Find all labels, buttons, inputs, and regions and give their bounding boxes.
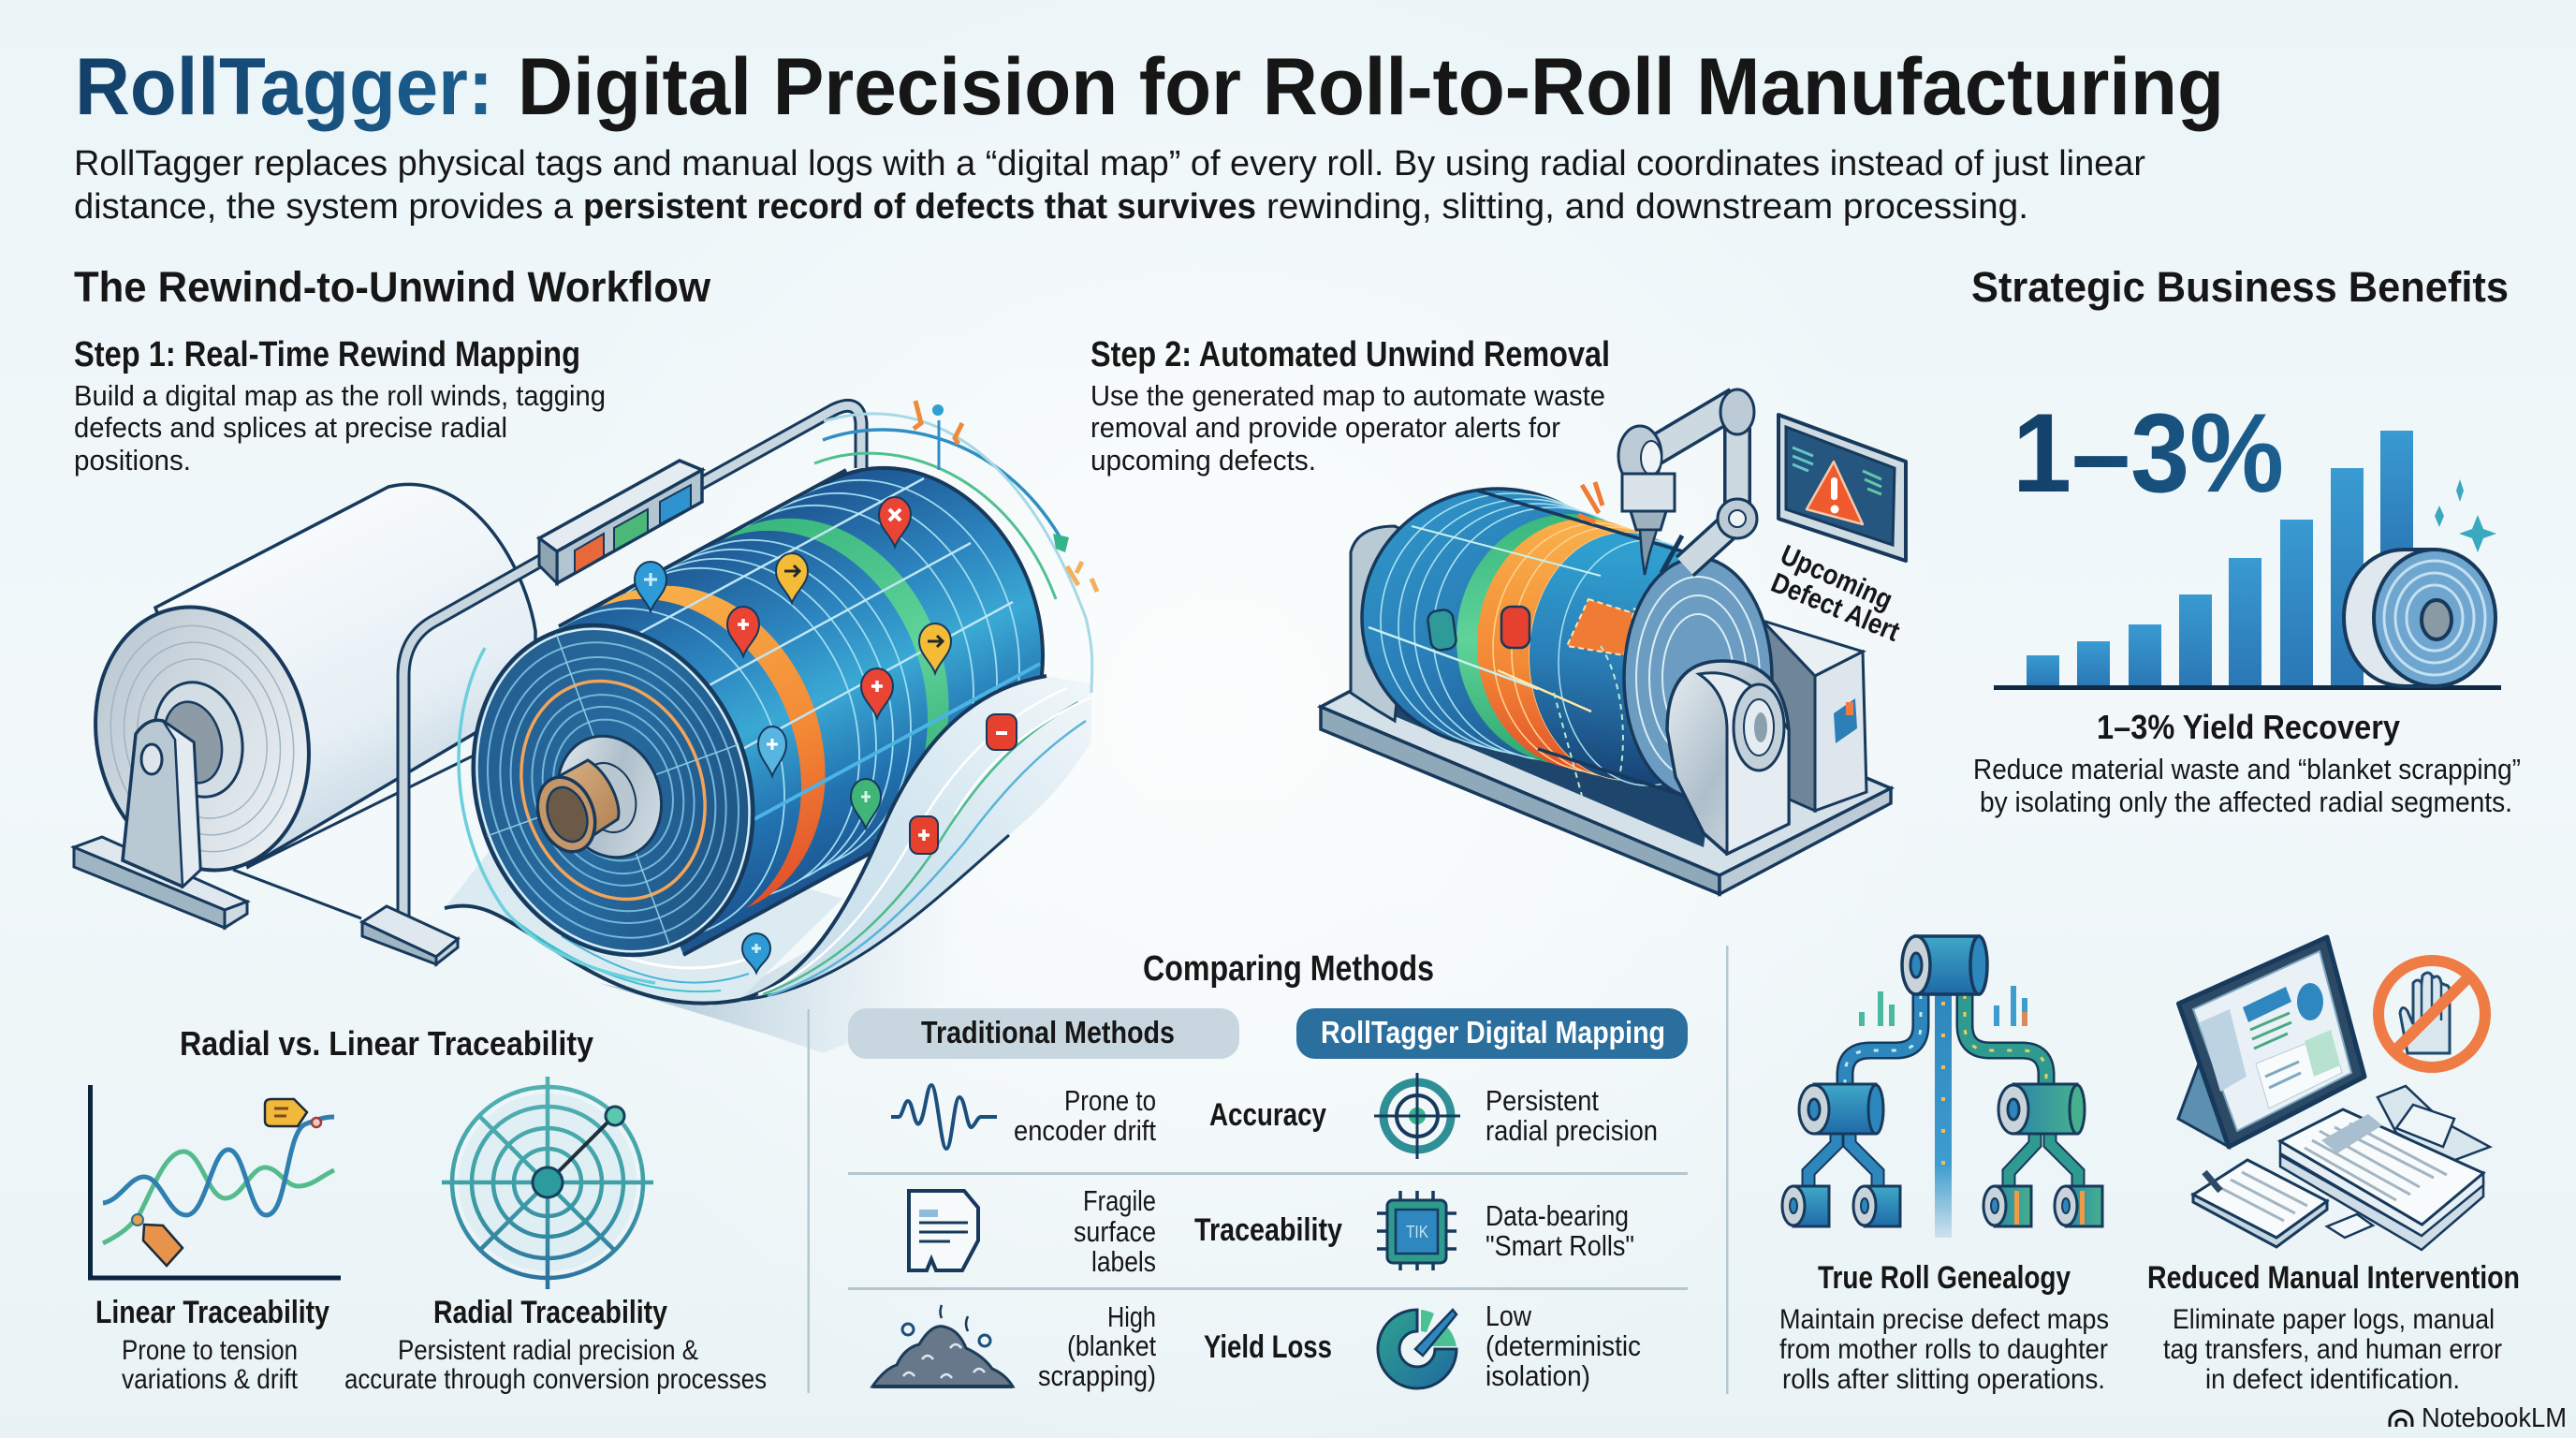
title: Digital Precision for Roll-to-Roll Manufacturing: [518, 42, 2224, 132]
mother roll: [1902, 936, 1987, 994]
icon: front bearing: [1667, 661, 1789, 854]
row: yield loss: High: [1107, 1300, 1156, 1333]
pill: rolltagger digital mapping: [1296, 1008, 1688, 1059]
row: yield loss: (blanket: [1067, 1329, 1156, 1362]
row: traceability: surface: [1074, 1215, 1156, 1248]
linear traceability text: Prone to tension: [122, 1335, 298, 1366]
icon: scrap pile: [872, 1305, 1013, 1388]
linear traceability text: [95, 1295, 329, 1395]
row: traceability: Data-bearing: [1486, 1199, 1629, 1232]
step 2 text: removal and provide operator alerts for: [1090, 411, 1560, 444]
row: yield loss: [872, 1299, 1641, 1392]
icon: tablet with paper logs: [2178, 937, 2490, 1250]
intro text block: RollTagger replaces physical tags and manual logs with a “digital map” of every roll. By using radial coordinates instead of just linear: [74, 144, 2145, 183]
heading: comparing methods: Comparing Methods: [1143, 949, 1434, 989]
icon: reduced pie: [1378, 1310, 1456, 1388]
benefit: reduced manual intervention text: [2147, 1260, 2520, 1395]
row: accuracy: Prone to: [1064, 1084, 1156, 1117]
benefit: yield recovery text: [1973, 708, 2521, 818]
intro text block: persistent record of defects that survives: [583, 187, 1256, 227]
icon: white source roll: [68, 484, 599, 936]
slit rolls: [1782, 1186, 2102, 1226]
icon: roll genealogy tree: [1782, 936, 2102, 1238]
icon: sensing arcs: [459, 401, 1097, 983]
benefit: yield recovery text: 1–3% Yield Recovery: [2097, 708, 2400, 746]
icon: core hub: [528, 722, 678, 872]
defect pins: [635, 497, 1017, 973]
icon: torn label: [909, 1191, 978, 1270]
icon: mapped roll: [1362, 489, 1772, 805]
step 1 text: [74, 335, 606, 477]
illustration: unwind removal machine: [1321, 389, 1906, 894]
benefit: yield recovery text: by isolating only the affected radial segments.: [1980, 785, 2512, 818]
logo: NotebookLM: NotebookLM: [2422, 1403, 2567, 1433]
mini bars: [1859, 986, 2027, 1026]
icon: mapped roll: [428, 468, 1043, 995]
illustration: rewind mapping rolls: [68, 401, 1097, 1053]
step 1 text: defects and splices at precise radial: [74, 411, 507, 444]
row: accuracy: Accuracy: [1209, 1097, 1326, 1133]
row: traceability: "Smart Rolls": [1486, 1229, 1634, 1262]
heading: workflow: The Rewind-to-Unwind Workflow: [74, 263, 711, 311]
radial traceability text: Radial Traceability: [433, 1295, 667, 1330]
row: traceability: Traceability: [1194, 1212, 1342, 1248]
stat: 1–3%: 1–3%: [2012, 390, 2284, 516]
pill: traditional methods: Traditional Methods: [921, 1015, 1175, 1049]
icon: machine base: [1321, 526, 1891, 894]
row: accuracy: radial precision: [1486, 1114, 1658, 1147]
title: RollTagger:: [75, 42, 493, 132]
callout: upcoming defect alert: Upcoming: [1776, 539, 1897, 616]
intro text block: rewinding, slitting, and downstream processing.: [1266, 187, 2028, 227]
benefit: reduced manual intervention text: Eliminate paper logs, manual: [2173, 1304, 2495, 1335]
step 2 text: Use the generated map to automate waste: [1090, 379, 1605, 412]
icon: film web sheet: [739, 676, 1091, 1000]
benefit: true roll genealogy text: rolls after slitting operations.: [1782, 1364, 2105, 1395]
row: yield loss: Low: [1486, 1299, 1532, 1332]
icon: yellow tag: [265, 1099, 321, 1127]
intro text block: [74, 144, 2145, 227]
icon: sensor pipe and bar: [362, 405, 861, 964]
row: yield loss: isolation): [1486, 1359, 1590, 1392]
pill: rolltagger digital mapping: RollTagger Digital Mapping: [1321, 1015, 1665, 1049]
benefit: reduced manual intervention text: tag transfers, and human error: [2163, 1334, 2502, 1365]
pill: traditional methods: [848, 1008, 1239, 1059]
row: traceability: labels: [1091, 1245, 1156, 1278]
callout: upcoming defect alert: [1766, 539, 1904, 648]
radial traceability text: accurate through conversion processes: [344, 1364, 767, 1395]
chart: linear traceability: [90, 1085, 341, 1278]
icon: orange tag: [132, 1214, 183, 1266]
icon: roll end face: [428, 585, 798, 995]
icon: small roll: [2344, 550, 2496, 686]
step 1 text: positions.: [74, 444, 191, 477]
row: accuracy: [891, 1073, 1658, 1159]
bar chart: yield recovery: [1994, 431, 2501, 690]
step 2 text: [1090, 335, 1610, 477]
panel: comparing methods: [848, 949, 1688, 1392]
row: accuracy: Persistent: [1486, 1084, 1599, 1117]
step 2 text: Step 2: Automated Unwind Removal: [1090, 335, 1610, 374]
icon: source roll bracket: [74, 720, 247, 928]
icon: target: [1374, 1073, 1460, 1159]
radial traceability text: Persistent radial precision &: [398, 1335, 698, 1366]
row: yield loss: (deterministic: [1486, 1329, 1641, 1362]
daughter rolls: [1799, 1084, 2085, 1134]
benefit: yield recovery text: Reduce material waste and “blanket scrapping”: [1973, 753, 2521, 785]
row: yield loss: scrapping): [1038, 1359, 1156, 1392]
row: accuracy: encoder drift: [1014, 1114, 1156, 1147]
row: traceability: [909, 1184, 1634, 1278]
callout: upcoming defect alert: Defect Alert: [1766, 567, 1904, 648]
intro text block: distance, the system provides a: [74, 187, 574, 227]
step 1 text: Step 1: Real-Time Rewind Mapping: [74, 335, 580, 374]
linear traceability text: Linear Traceability: [95, 1295, 329, 1330]
icon: film web under roll: [445, 843, 842, 1004]
chart: radial traceability: [442, 1077, 653, 1289]
icon: alert monitor: [1778, 415, 1906, 561]
icon: smart chip: TIK: [1406, 1223, 1428, 1241]
icon: robot arm: [1578, 389, 1757, 575]
row: yield loss: Yield Loss: [1204, 1329, 1332, 1365]
icon: housing cabinet: [1760, 621, 1866, 811]
benefit: true roll genealogy text: Maintain precise defect maps: [1779, 1304, 2109, 1335]
icon: sparkles: [2435, 479, 2496, 552]
row: traceability: Fragile: [1083, 1184, 1156, 1217]
icon: smart chip: [1377, 1191, 1456, 1270]
icon: prohibited hand: [2378, 961, 2485, 1067]
heading: benefits: Strategic Business Benefits: [1971, 263, 2509, 311]
benefit: true roll genealogy text: True Roll Genealogy: [1818, 1260, 2071, 1296]
benefit: true roll genealogy text: from mother rolls to daughter: [1779, 1334, 2108, 1365]
radial traceability text: [344, 1295, 767, 1395]
icon: noisy wave: [891, 1085, 997, 1149]
heading: radial vs linear: Radial vs. Linear Traceability: [180, 1024, 593, 1063]
icon: paper stack: [2280, 1086, 2490, 1250]
icon: notebook: [2193, 1160, 2373, 1247]
step 2 text: upcoming defects.: [1090, 444, 1316, 477]
benefit: reduced manual intervention text: in defect identification.: [2205, 1364, 2460, 1395]
linear traceability text: variations & drift: [122, 1364, 299, 1395]
step 1 text: Build a digital map as the roll winds, tagging: [74, 379, 606, 412]
benefit: true roll genealogy text: [1779, 1260, 2109, 1395]
